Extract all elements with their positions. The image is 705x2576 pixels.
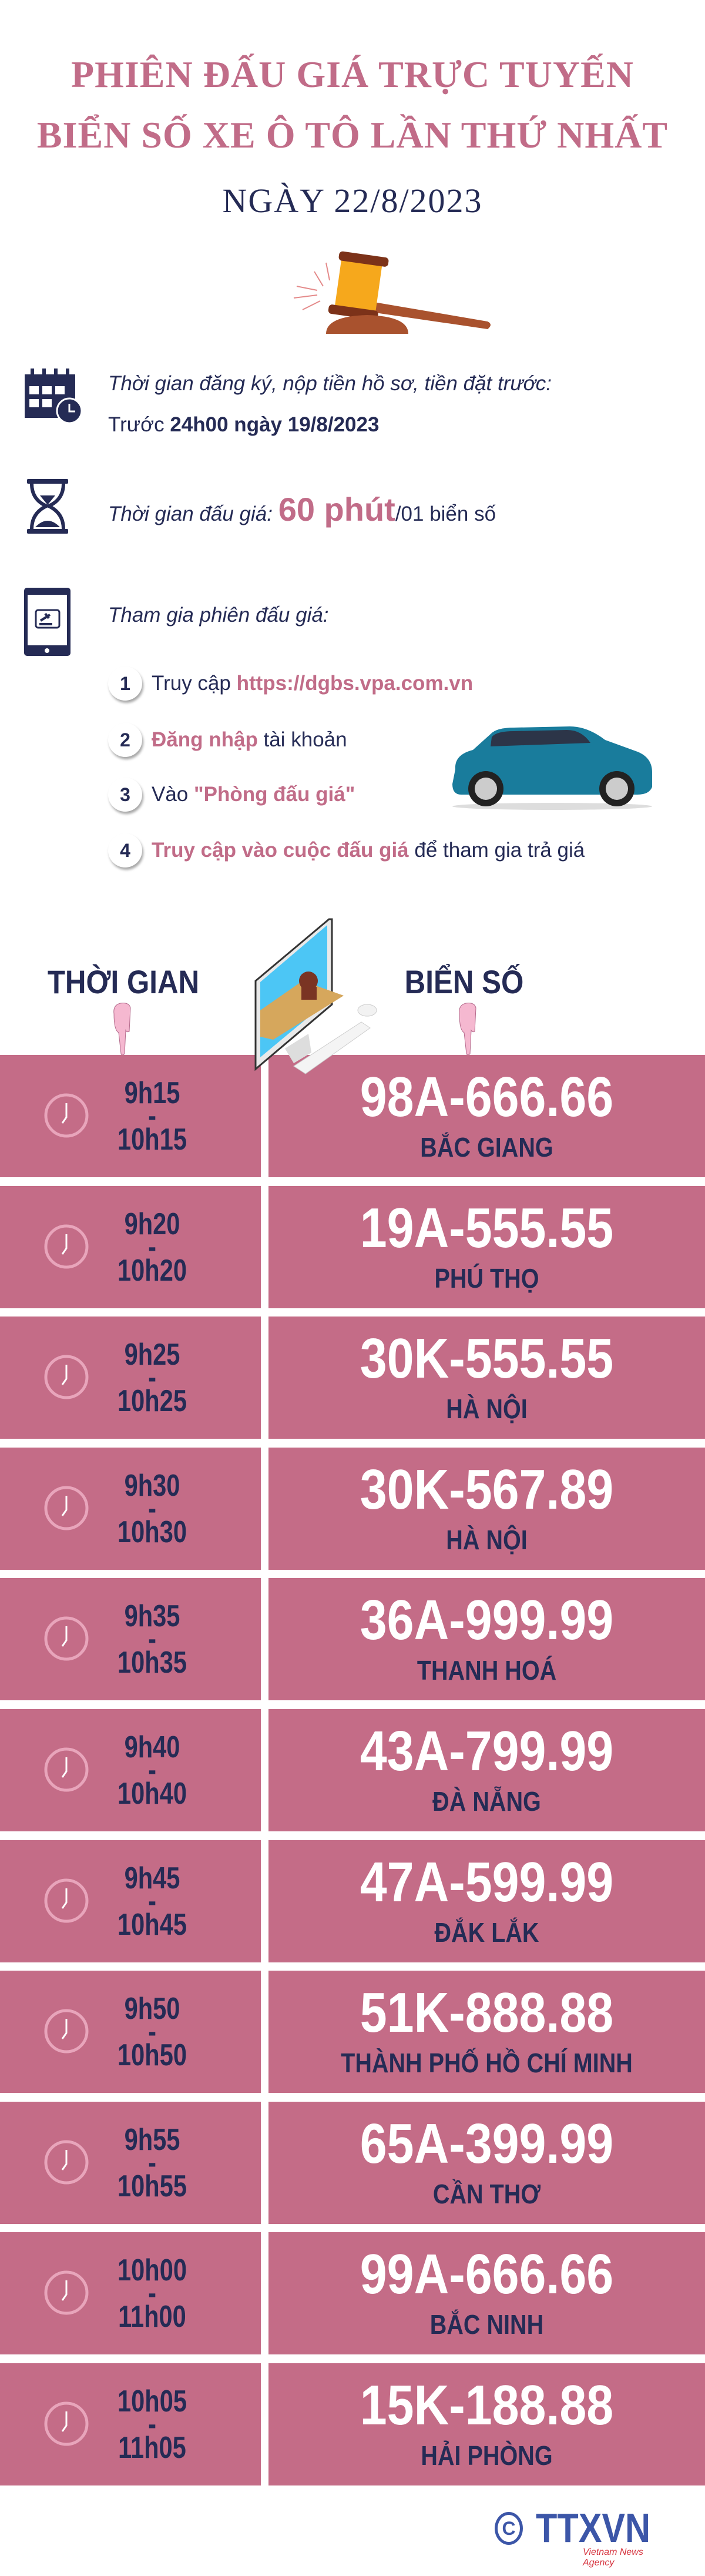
row 4: 10h30 — [118, 1515, 187, 1549]
row 10 — [0, 2232, 705, 2354]
text: participate heading: Tham gia phiên đấu giá: — [108, 604, 329, 627]
row 1: 10h15 — [118, 1123, 187, 1157]
row 10: 99A-666.66 — [360, 2243, 613, 2306]
row 3: 9h25 — [125, 1338, 180, 1372]
title: PHIÊN ĐẤU GIÁ TRỰC TUYẾN — [71, 53, 634, 95]
step 4 — [108, 837, 585, 871]
header: plate column: BIỂN SỐ — [405, 963, 523, 1000]
row 7: 9h45 — [125, 1861, 180, 1895]
text: registration time — [108, 372, 552, 436]
row 9 — [0, 2102, 705, 2224]
row 9: - — [148, 2146, 156, 2180]
row 4: 30K-567.89 — [360, 1458, 613, 1521]
row 10: - — [148, 2276, 156, 2310]
row 2: 9h20 — [125, 1207, 180, 1241]
title: BIỂN SỐ XE Ô TÔ LẦN THỨ NHẤT — [37, 114, 668, 156]
icon: pointing hand right — [459, 1003, 476, 1055]
step 2: tài khoản — [264, 728, 347, 751]
text: registration time: Thời gian đăng ký, nộp tiền hồ sơ, tiền đặt trước: — [108, 372, 552, 395]
row 2: 19A-555.55 — [360, 1197, 613, 1259]
row 8: - — [148, 2015, 156, 2049]
step 4: để tham gia trả giá — [414, 839, 585, 862]
row 11: HẢI PHÒNG — [421, 2440, 553, 2471]
row 11 — [0, 2363, 705, 2485]
row 5: 10h35 — [118, 1646, 187, 1680]
row 8: 51K-888.88 — [360, 1981, 613, 2044]
row 7: 10h45 — [118, 1908, 187, 1942]
row 5: - — [148, 1622, 156, 1656]
row 6: - — [148, 1753, 156, 1787]
copyright symbol — [495, 2512, 523, 2545]
text: registration time: Trước 24h00 ngày 19/8/2023 — [108, 413, 379, 436]
step 3 — [108, 780, 355, 816]
header: time column: THỜI GIAN — [48, 963, 199, 1000]
row 4: 9h30 — [125, 1469, 180, 1503]
row 4 — [0, 1448, 705, 1570]
row 2: 10h20 — [118, 1254, 187, 1288]
icon: hourglass — [27, 479, 68, 534]
row 5: THANH HOÁ — [417, 1655, 556, 1686]
row 9: 9h55 — [125, 2123, 180, 2157]
row 8: THÀNH PHỐ HỒ CHÍ MINH — [341, 2048, 633, 2078]
step 3: Vào — [152, 783, 188, 806]
logo: TTXVN — [495, 2505, 650, 2568]
row 8 — [0, 1971, 705, 2093]
steps list — [108, 670, 585, 871]
icon: pointing hand left — [113, 1003, 130, 1055]
row 11: 11h05 — [118, 2431, 186, 2465]
row 1: - — [148, 1099, 156, 1133]
row 10: 10h00 — [118, 2253, 187, 2287]
row 9: CẦN THƠ — [433, 2179, 540, 2209]
icon: gavel — [294, 252, 491, 334]
step 2: Đăng nhập — [152, 728, 258, 751]
row 10: 11h00 — [118, 2300, 186, 2334]
row 1: BẮC GIANG — [420, 1132, 553, 1163]
row 1: 98A-666.66 — [360, 1066, 613, 1128]
row 3: 30K-555.55 — [360, 1327, 613, 1390]
row 9: 10h55 — [118, 2169, 187, 2203]
row 6: 9h40 — [125, 1730, 180, 1764]
table rows — [0, 1055, 705, 2485]
wordmark: TTXVN — [536, 2505, 650, 2551]
row 9: 65A-399.99 — [360, 2112, 613, 2175]
row 4: HÀ NỘI — [446, 1525, 528, 1555]
step 1: https://dgbs.vpa.com.vn — [237, 672, 473, 695]
row 6: ĐÀ NẴNG — [432, 1786, 541, 1817]
row 11: 10h05 — [118, 2384, 187, 2418]
step 2: 2 — [120, 729, 130, 750]
row 7: ĐẮK LẮK — [434, 1917, 539, 1948]
row 11: 15K-188.88 — [360, 2374, 613, 2437]
step 1: 1 — [120, 672, 130, 694]
row 7: 47A-599.99 — [360, 1851, 613, 1914]
row 11: - — [148, 2407, 156, 2441]
row 3: HÀ NỘI — [446, 1393, 528, 1424]
row 7 — [0, 1840, 705, 1962]
row 2: PHÚ THỌ — [434, 1263, 539, 1294]
text: auction duration: Thời gian đấu giá: 60 phút/01 biển số — [108, 491, 496, 528]
date subtitle: NGÀY 22/8/2023 — [222, 182, 483, 220]
row 2 — [0, 1186, 705, 1308]
row 8: 10h50 — [118, 2038, 187, 2072]
step 3: "Phòng đấu giá" — [194, 783, 355, 806]
row 3: 10h25 — [118, 1384, 187, 1418]
row 10: BẮC NINH — [430, 2309, 543, 2340]
row 7: - — [148, 1884, 156, 1918]
row 6 — [0, 1709, 705, 1831]
row 2: - — [148, 1230, 156, 1264]
row 1: 9h15 — [125, 1076, 180, 1110]
step 4: 4 — [120, 839, 130, 860]
title — [37, 53, 668, 156]
icon: computer with gavel — [255, 918, 377, 1074]
step 3: 3 — [120, 784, 130, 805]
row 6: 10h40 — [118, 1777, 187, 1811]
row 1 — [0, 1055, 705, 1177]
step 1 — [108, 670, 473, 704]
row 5: 36A-999.99 — [360, 1589, 613, 1652]
step 1: Truy cập — [152, 672, 231, 695]
row 8: 9h50 — [125, 1992, 180, 2026]
row 4: - — [148, 1492, 156, 1526]
row 5: 9h35 — [125, 1599, 180, 1633]
step 2 — [108, 726, 347, 761]
row 3 — [0, 1317, 705, 1439]
copyright symbol: C — [502, 2518, 516, 2539]
row 5 — [0, 1578, 705, 1700]
icon: tablet — [24, 588, 70, 656]
icon: car — [452, 726, 652, 810]
row 3: - — [148, 1361, 156, 1395]
tagline: Vietnam News Agency — [583, 2547, 643, 2568]
icon: calendar — [25, 369, 81, 422]
row 6: 43A-799.99 — [360, 1720, 613, 1783]
step 4: Truy cập vào cuộc đấu giá — [152, 839, 409, 862]
